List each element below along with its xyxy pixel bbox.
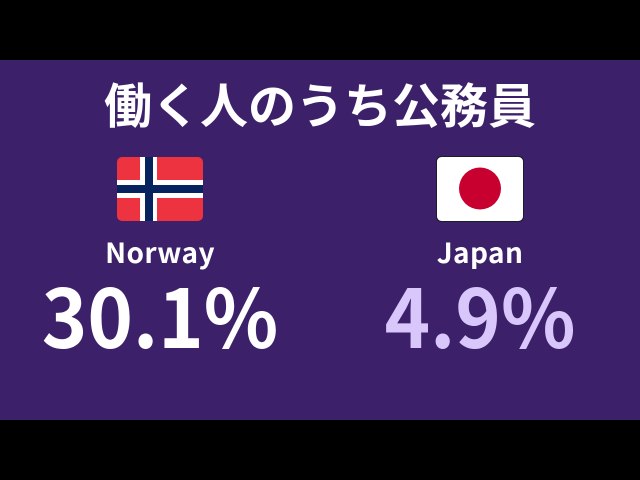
value: Norway 30.1%: 30.1% [42, 255, 278, 372]
value: Japan 4.9%: 4.9% [385, 255, 575, 372]
panel: purple background [0, 60, 640, 420]
label: Norway: Norway [105, 232, 215, 272]
icon: Japan flag [436, 156, 524, 222]
icon: Norway flag [117, 157, 203, 221]
title: 働く人のうち公務員 [104, 67, 536, 137]
label: Japan: Japan [437, 232, 523, 272]
